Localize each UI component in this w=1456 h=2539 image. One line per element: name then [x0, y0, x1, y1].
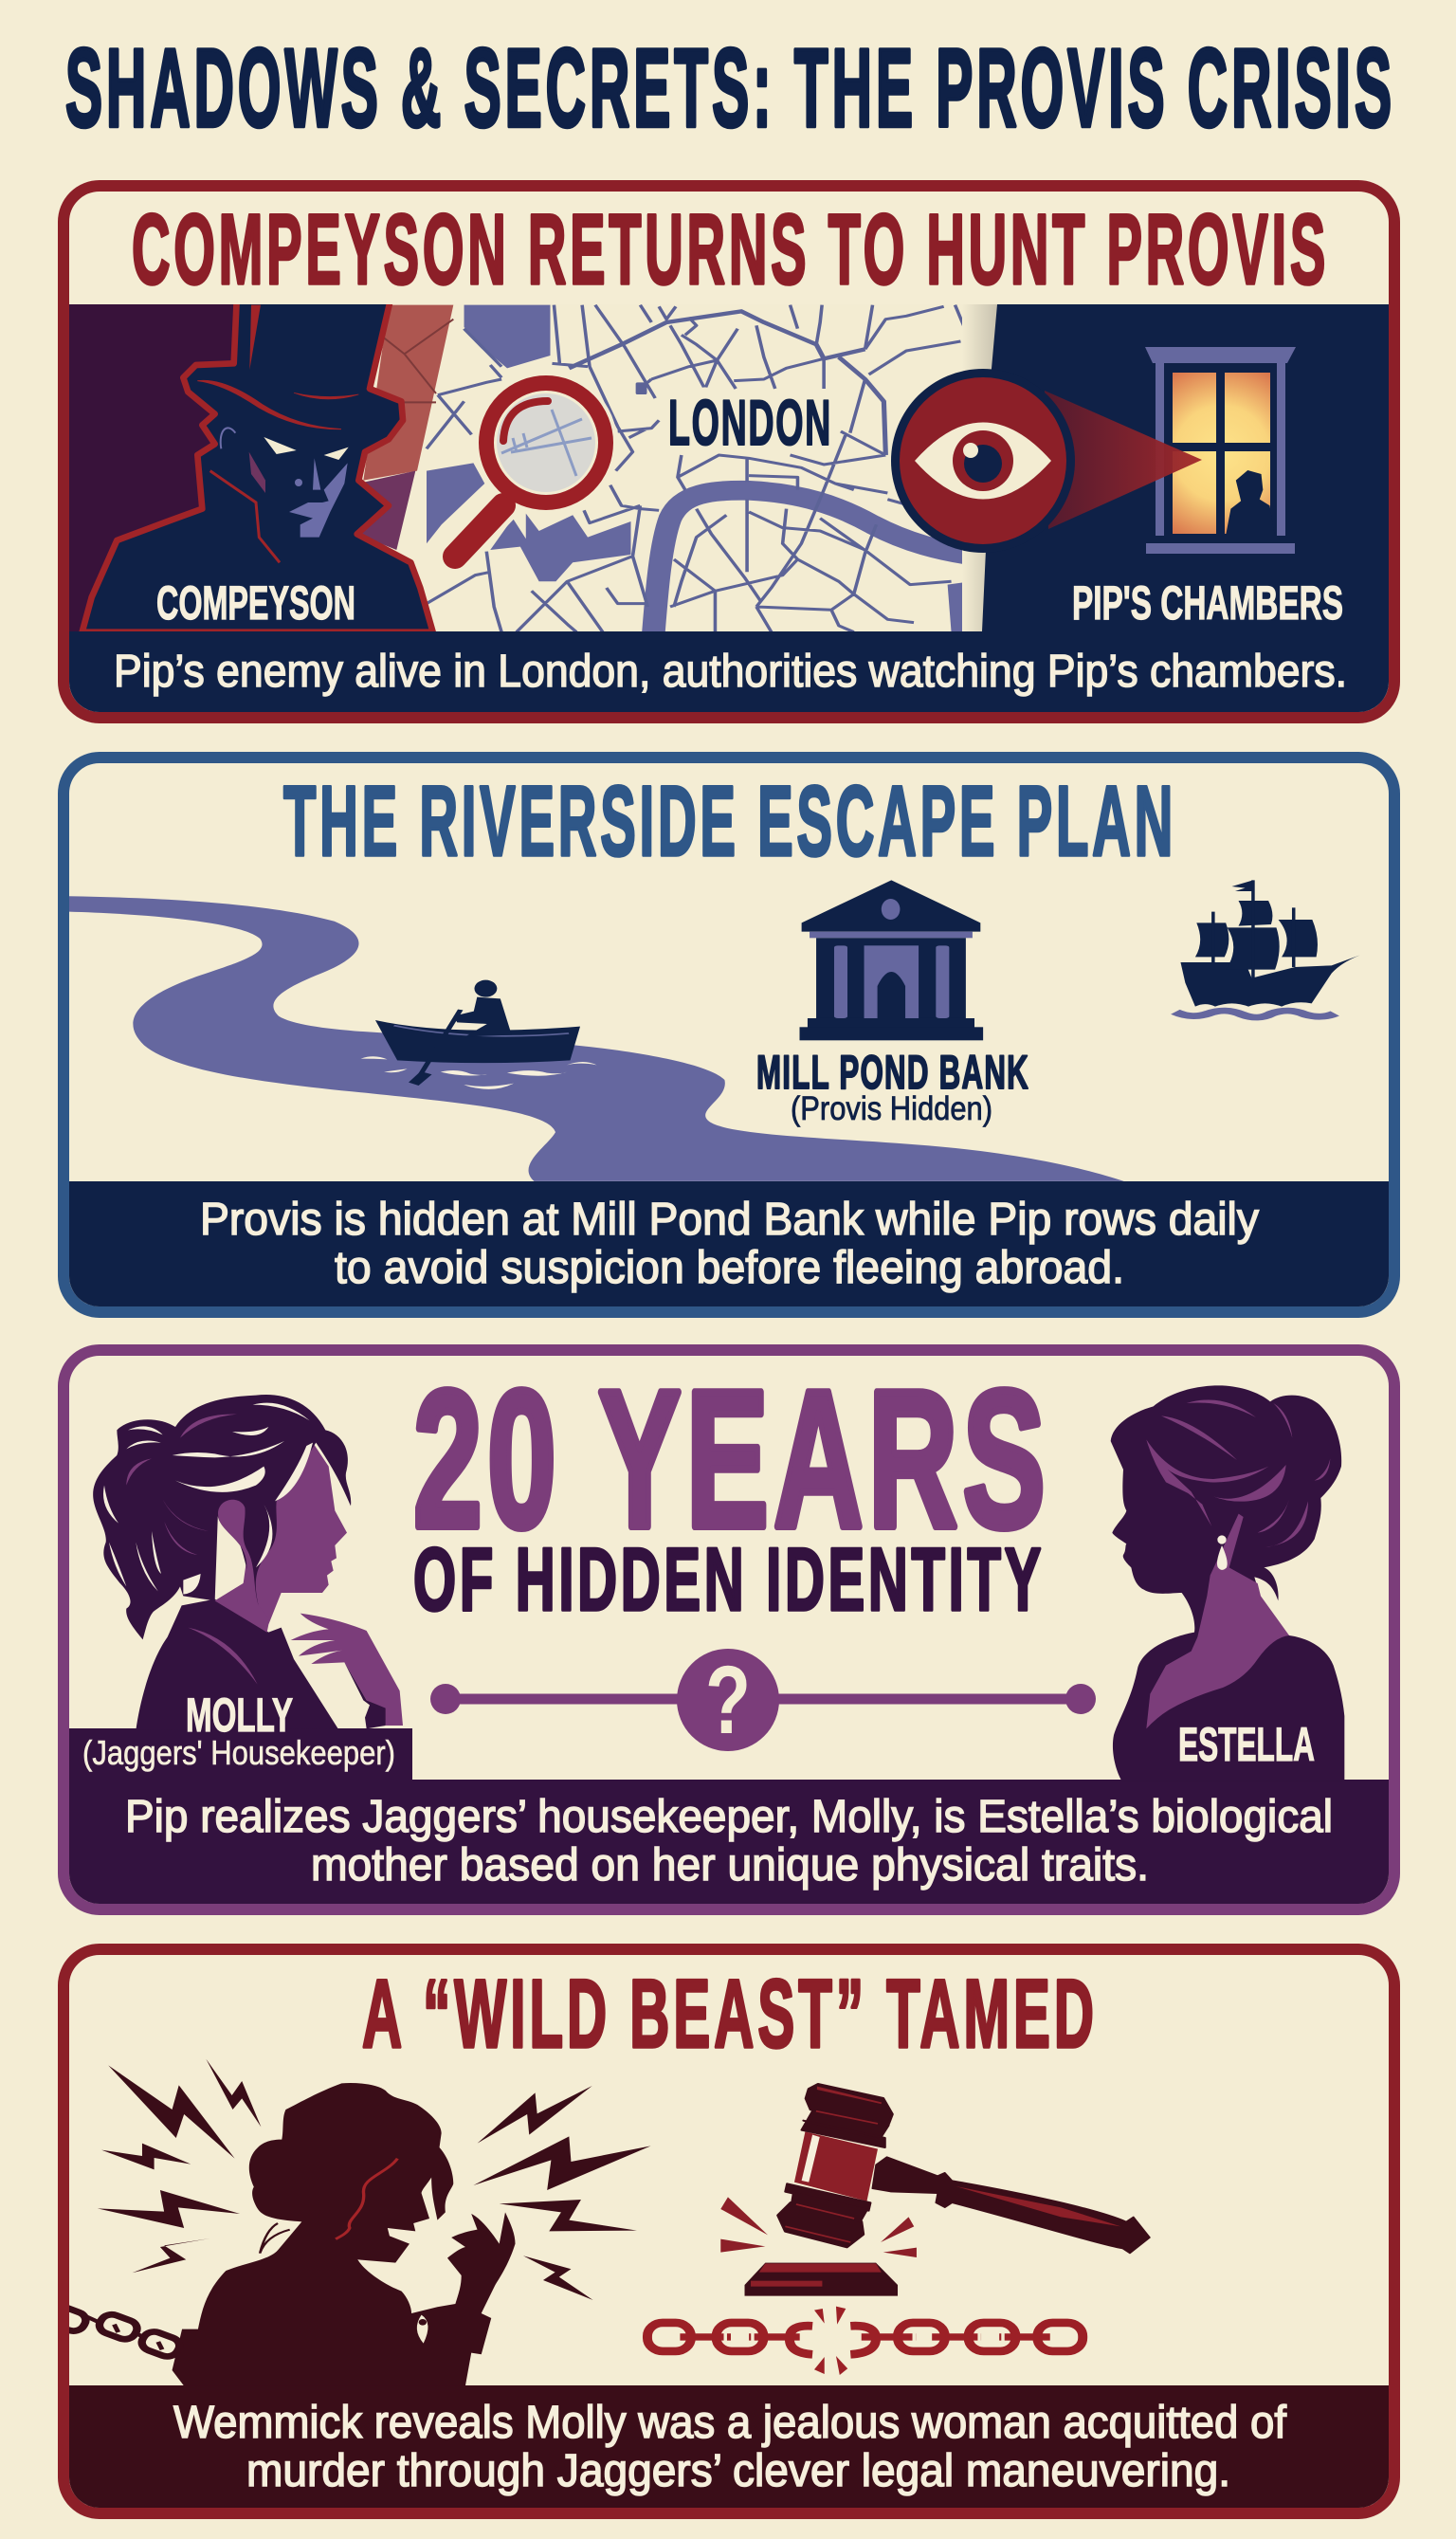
- caption text: murder through Jaggers’ clever legal maneuvering.: [246, 2446, 1230, 2496]
- caption band: [69, 1181, 1389, 1308]
- caption text: Pip realizes Jaggers’ housekeeper, Molly, is Estella’s biological: [125, 1792, 1333, 1842]
- icon: gavel and block: [720, 2084, 1150, 2296]
- caption text: mother based on her unique physical traits.: [311, 1840, 1149, 1891]
- map of London: [427, 305, 992, 635]
- connector with question mark: [430, 1646, 1096, 1754]
- icon: Mill Pond Bank building: [800, 880, 983, 1040]
- caption text: Wemmick reveals Molly was a jealous woman acquitted of: [173, 2398, 1287, 2448]
- caption text: [125, 1792, 1333, 1891]
- caption band: [69, 1728, 1389, 1907]
- label: London: LONDON: [668, 387, 832, 459]
- label: Molly: [82, 1689, 395, 1772]
- subheading: of hidden identity: OF HIDDEN IDENTITY: [413, 1529, 1045, 1629]
- illustration: river: [68, 896, 1389, 1308]
- label: Provis hidden: (Provis Hidden): [791, 1090, 992, 1127]
- panel: Compeyson returns to hunt Provis: [64, 186, 1394, 718]
- navy wall behind window: [982, 304, 1389, 631]
- caption text: [173, 2398, 1287, 2496]
- panel: The riverside escape plan: [64, 758, 1394, 1312]
- caption band: [69, 2385, 1389, 2512]
- icon: broken chain: [647, 2307, 1083, 2375]
- panel: A wild beast tamed: [45, 1949, 1394, 2513]
- window: Pip's chambers: [1145, 347, 1296, 554]
- label: Estella: ESTELLA: [1178, 1718, 1315, 1771]
- label: Molly: MOLLY: [186, 1689, 293, 1742]
- label: Mill Pond Bank: MILL POND BANK: [756, 1046, 1029, 1099]
- caption text: Provis is hidden at Mill Pond Bank while Pip rows daily: [200, 1195, 1259, 1245]
- illustration: London map scene: [66, 294, 1389, 717]
- sublabel: Jaggers' housekeeper: (Jaggers' Housekeeper): [82, 1733, 395, 1772]
- icon: rowing boat: [361, 980, 597, 1089]
- caption band: [69, 631, 1389, 717]
- caption text: [200, 1195, 1259, 1293]
- connector with question mark: ?: [705, 1646, 751, 1754]
- silhouette: Estella: [1111, 1385, 1344, 1781]
- icon: sailing ship: [1175, 880, 1360, 1017]
- shaded map edge: [962, 304, 1000, 631]
- silhouette: enraged Molly with lightning and chain: [45, 2059, 651, 2386]
- panel: 20 years of hidden identity: [64, 1350, 1394, 1909]
- caption text: to avoid suspicion before fleeing abroad.: [335, 1243, 1124, 1293]
- Compeyson figure: [66, 294, 453, 635]
- icon: magnifying glass: [455, 372, 617, 557]
- caption text: Pip’s enemy alive in London, authorities watching Pip’s chambers.: [114, 647, 1347, 697]
- silhouette: Molly: [93, 1395, 403, 1730]
- icon: watching eye with sight cone: [891, 369, 1202, 553]
- label: Compeyson: COMPEYSON: [156, 576, 355, 630]
- big number: 20 years: 20 YEARS: [413, 1350, 1050, 1568]
